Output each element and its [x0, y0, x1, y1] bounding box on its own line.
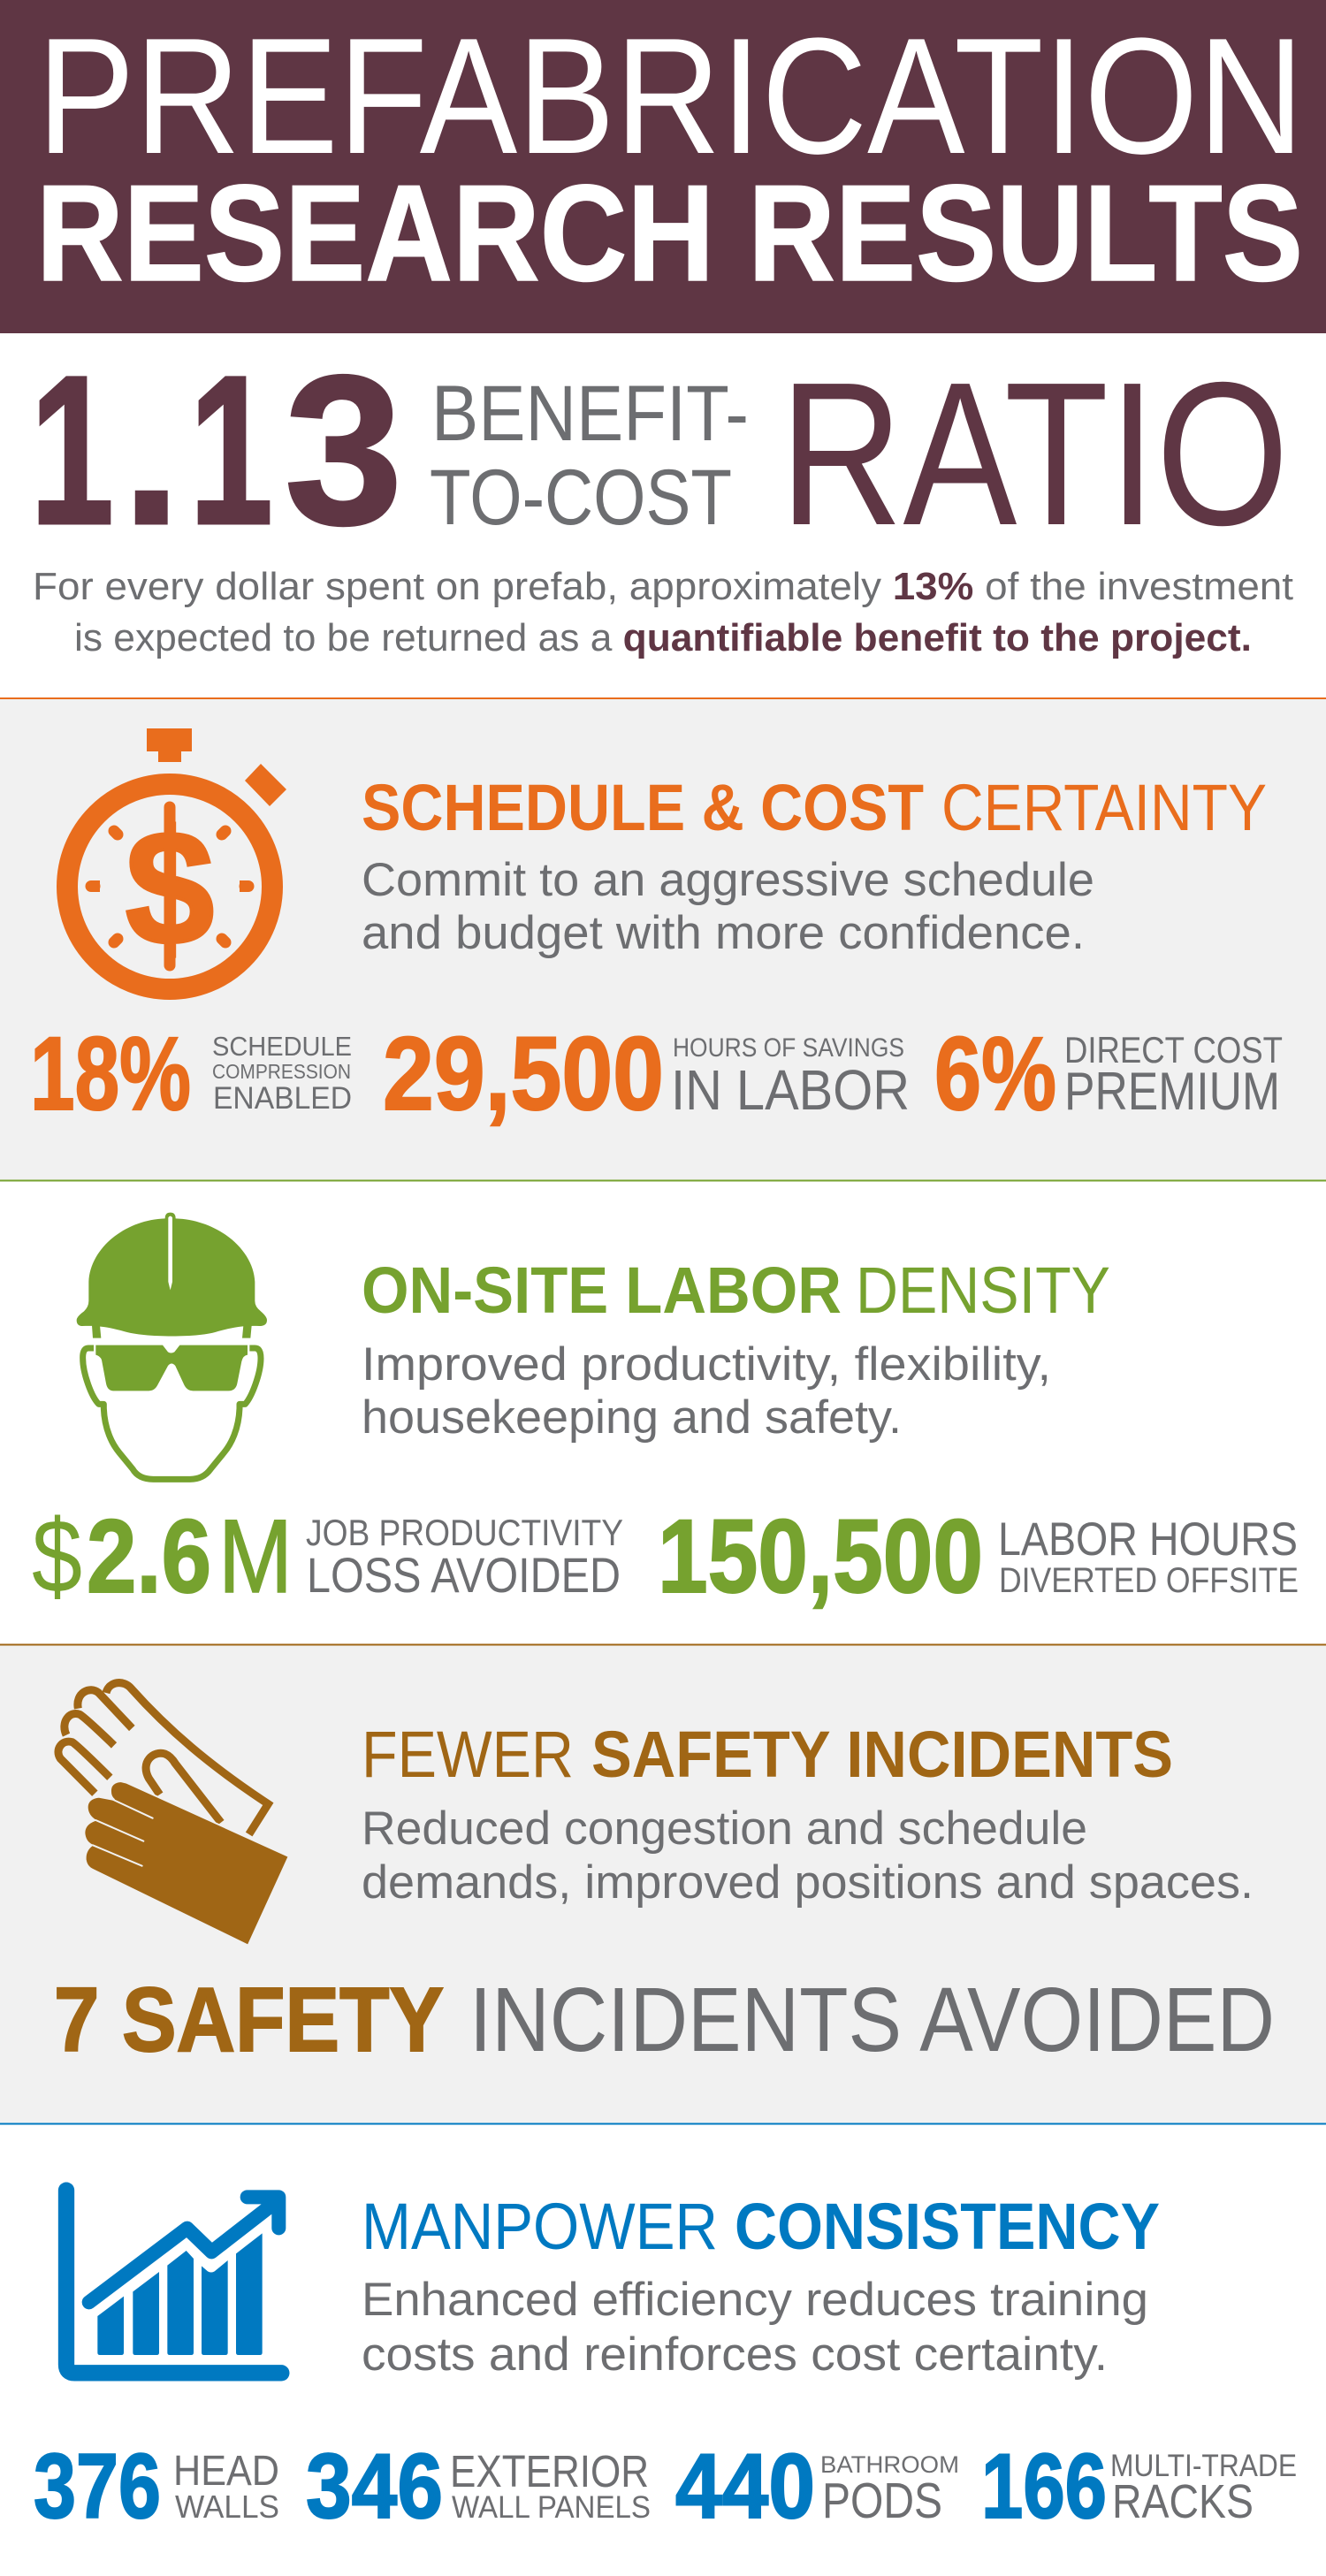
icon: stopwatch with dollar sign [67, 728, 286, 989]
description: demands, improved positions and spaces. [362, 1856, 1254, 1909]
stat: 346 exterior wall panels: 346 [306, 2435, 443, 2538]
icon: safety gloves [58, 1683, 289, 1946]
title banner [0, 0, 1326, 333]
stat: 29,500 hours [383, 1016, 910, 1132]
stat: 346 exterior wall panels: WALL PANELS [452, 2490, 651, 2525]
stat: 18% schedule compression: 18% [30, 1016, 191, 1132]
stat: 376 head walls [34, 2435, 279, 2538]
stat: 440 bathroom pods [675, 2435, 959, 2538]
stat: 166 multi-trade racks [981, 2435, 1297, 2538]
headline: benefit-to-cost ratio: . [122, 332, 181, 568]
description: Improved productivity, flexibility, [362, 1338, 1051, 1391]
stat: 346 exterior wall panels [306, 2435, 651, 2538]
headline: benefit-to-cost ratio: 3 [285, 332, 402, 568]
heading: ON-SITE LABOR [362, 1254, 842, 1327]
heading: SAFETY INCIDENTS [591, 1718, 1173, 1791]
stat: 18% schedule compression: SCHEDULE [212, 1031, 352, 1062]
stat: 346 exterior wall panels: EXTERIOR [450, 2446, 649, 2496]
stat: 6% direct cost premium: PREMIUM [1064, 1062, 1280, 1121]
description [362, 854, 1094, 959]
panel: on-site labor density [0, 1179, 1326, 1644]
heading: CERTAINTY [941, 771, 1267, 844]
description: housekeeping and safety. [362, 1391, 902, 1444]
description: Commit to an aggressive schedule [362, 854, 1094, 906]
stat: 18% schedule compression: ENABLED [213, 1081, 352, 1116]
stat: 376 head walls: 376 [34, 2435, 161, 2538]
stat: 6% direct cost premium: 6% [934, 1016, 1056, 1132]
description: costs and reinforces cost certainty. [362, 2328, 1108, 2381]
stat: 150,500 labor hours [658, 1498, 1299, 1615]
stat: $2.6M productivity loss avoided: M [218, 1498, 293, 1615]
panel: fewer safety incidents [0, 1644, 1326, 2123]
description [362, 1338, 1051, 1444]
headline: benefit-to-cost ratio: 1 [30, 332, 114, 568]
heading: SCHEDULE & COST [362, 771, 924, 844]
stat: 7 safety incidents avoided: 7 SAFETY [54, 1969, 444, 2070]
stat: $2.6M productivity loss avoided: 2.6 [87, 1498, 211, 1615]
stat: $2.6M productivity loss avoided: JOB PRODUCTIVITY [306, 1512, 623, 1553]
stat: 440 bathroom pods: 440 [675, 2435, 815, 2538]
panel: manpower consistency [0, 2123, 1326, 2576]
description: and budget with more confidence. [362, 907, 1085, 959]
headline: benefit-to-cost ratio [30, 332, 1289, 568]
headline: benefit-to-cost ratio: TO-COST [430, 453, 732, 541]
stat: 6% direct cost premium [934, 1016, 1283, 1132]
stat: 18% schedule compression [30, 1016, 352, 1132]
icon: rising bar chart with arrow [66, 2191, 281, 2373]
heading: CONSISTENCY [735, 2190, 1160, 2263]
stat: 18% schedule compression: COMPRESSION [212, 1060, 351, 1083]
stat: $2.6M productivity loss avoided: LOSS AVOIDED [307, 1547, 621, 1603]
intro paragraph [33, 565, 1293, 659]
stat: 166 multi-trade racks: 166 [981, 2435, 1107, 2538]
icon: worker with hard hat and safety glasses [77, 1213, 267, 1479]
stat: 440 bathroom pods: PODS [822, 2473, 942, 2529]
stat: 166 multi-trade racks: MULTI-TRADE [1110, 2449, 1297, 2483]
heading: MANPOWER [362, 2190, 718, 2263]
stat: 29,500 hours: HOURS OF SAVINGS [673, 1033, 904, 1063]
stat: 150,500 labor hours: 150,500 [658, 1498, 983, 1615]
intro paragraph: For every dollar spent on prefab, approximately 13% of the investment [33, 565, 1293, 608]
description [362, 1802, 1254, 1909]
stat: 376 head walls: WALLS [175, 2488, 279, 2525]
icon: stopwatch with dollar sign: $ [126, 796, 214, 979]
intro paragraph: is expected to be returned as a quantifiable benefit to the project. [74, 616, 1252, 659]
description: Reduced congestion and schedule [362, 1802, 1087, 1855]
stat: 7 safety incidents avoided [54, 1969, 1275, 2070]
heading: FEWER [362, 1718, 574, 1791]
stat: 29,500 hours: 29,500 [383, 1016, 664, 1132]
stat: 376 head walls: HEAD [173, 2448, 279, 2495]
stat: 166 multi-trade racks: RACKS [1112, 2475, 1254, 2528]
stat: $2.6M productivity loss avoided: $ [32, 1498, 82, 1615]
headline: benefit-to-cost ratio: BENEFIT- [431, 369, 749, 457]
stat: 29,500 hours: IN LABOR [671, 1058, 910, 1122]
heading: DENSITY [856, 1254, 1110, 1327]
panel: schedule and cost certainty [0, 697, 1326, 1180]
stat: 440 bathroom pods: BATHROOM [820, 2451, 959, 2478]
description [362, 2274, 1148, 2381]
headline: benefit-to-cost ratio: 1 [189, 332, 273, 568]
description: Enhanced efficiency reduces training [362, 2274, 1148, 2326]
stat: $2.6M productivity loss avoided [32, 1498, 623, 1615]
stat: 6% direct cost premium: DIRECT COST [1064, 1029, 1283, 1071]
